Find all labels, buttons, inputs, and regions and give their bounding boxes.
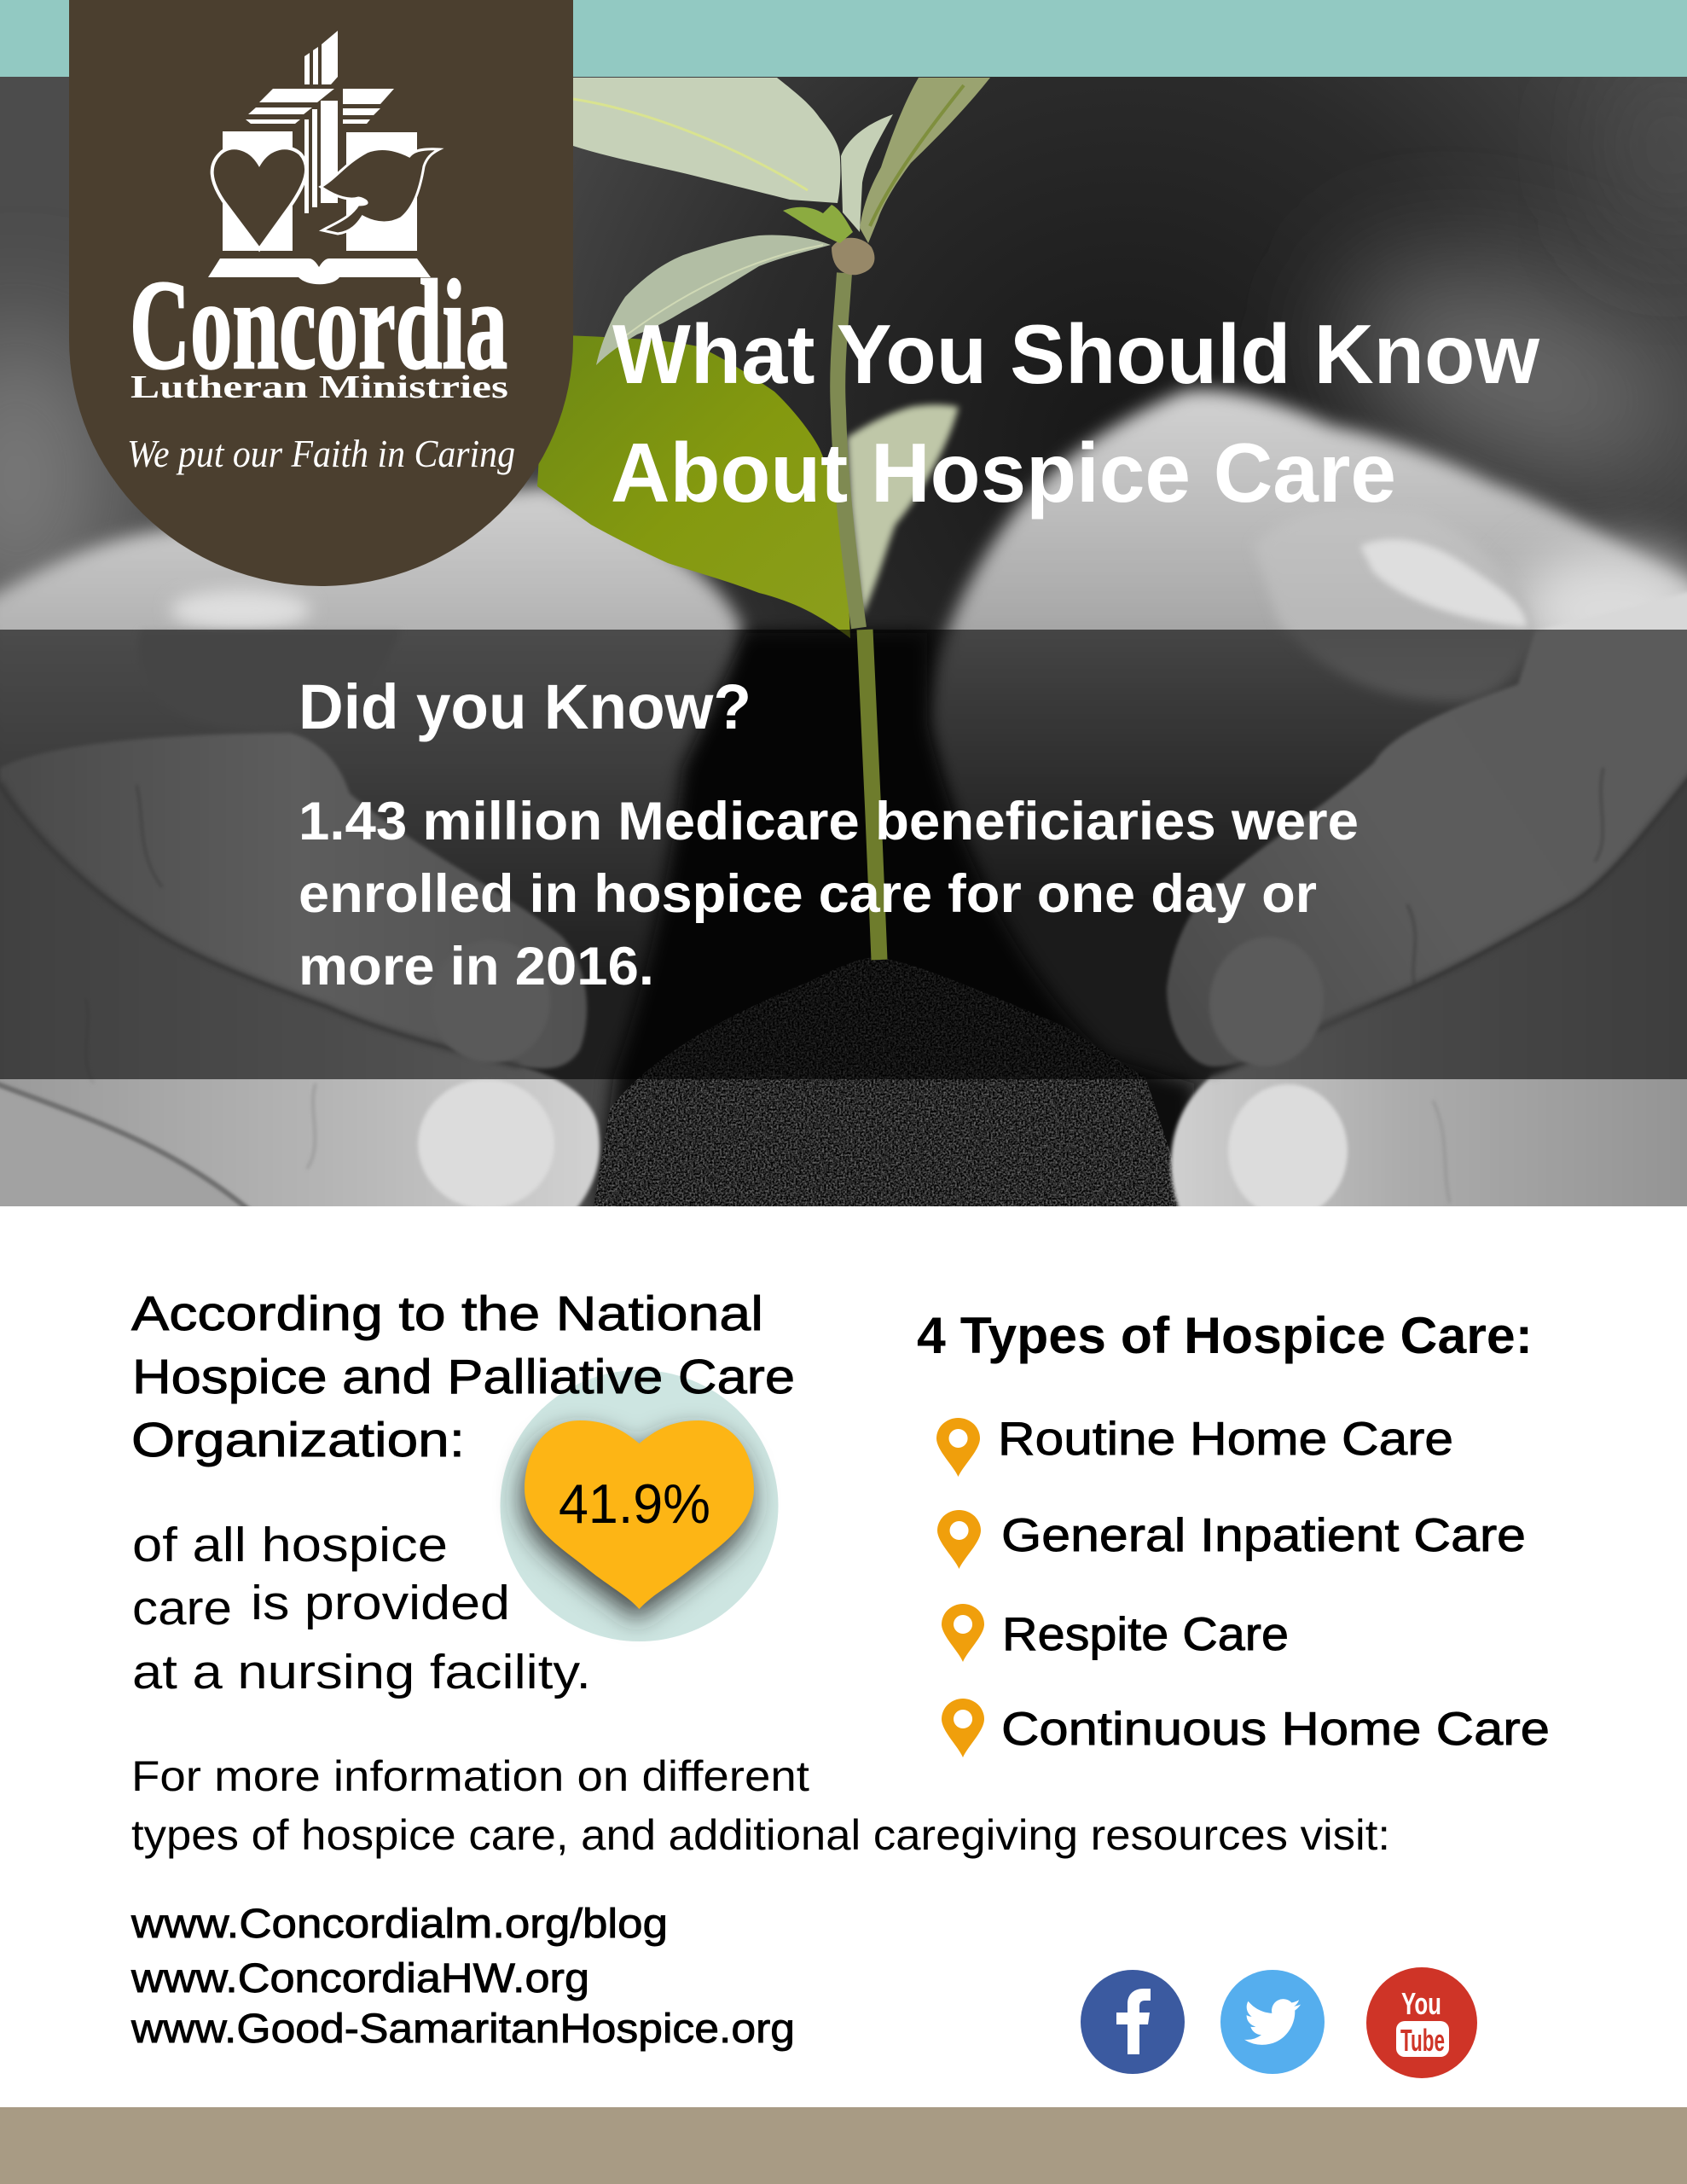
nursing facility text: of all hospice [132, 1518, 448, 1572]
pale circle [500, 1370, 778, 1641]
resource links: www.ConcordiaHW.org [130, 1956, 589, 2001]
right hand [926, 376, 1687, 894]
statistic circle and heart [500, 1370, 778, 1641]
resource links: www.Concordialm.org/blog [130, 1902, 668, 1947]
nursing facility text: is provided [251, 1576, 510, 1630]
heart shadow [522, 1432, 751, 1621]
footer bar [0, 2107, 1687, 2184]
icon: map pin [937, 1510, 981, 1569]
hero photo: hands cradling a seedling [0, 60, 1687, 1220]
stem [838, 273, 859, 628]
list item: routine home care [936, 1412, 1453, 1477]
main title: About Hospice Care [611, 426, 1396, 520]
did you know heading: Did you Know? [299, 671, 751, 742]
icon: map pin [942, 1699, 984, 1757]
upper right olive leaf [860, 78, 990, 243]
did you know statistic [299, 792, 1359, 996]
nursing facility text [132, 1518, 591, 1699]
seedling [537, 78, 990, 638]
upper left leaf [573, 78, 840, 203]
icon: youtube [1366, 1967, 1477, 2078]
logo subtitle: Lutheran Ministries [130, 369, 508, 405]
top teal bar [0, 0, 1687, 77]
icon: youtube: You [1401, 1986, 1441, 2021]
heart [525, 1420, 754, 1609]
logo tagline: We put our Faith in Caring [127, 432, 515, 475]
NHPCO heading: According to the National [131, 1287, 763, 1341]
percentage: 41.9% [559, 1472, 710, 1535]
more information text: types of hospice care, and additional caregiving resources visit: [131, 1811, 1390, 1859]
nursing facility text: care [132, 1581, 232, 1635]
photo background [0, 77, 1687, 1206]
list item: continuous home care: Continuous Home Care [1001, 1702, 1550, 1755]
logo emblem: cross, heart, dove and book [208, 31, 439, 284]
icon: map pin [936, 1418, 980, 1477]
more information text [131, 1752, 1390, 1859]
types heading: 4 Types of Hospice Care: [917, 1307, 1533, 1364]
logo shield [69, 0, 573, 586]
logo wordmark: Concordia [130, 254, 507, 396]
green leaf [537, 334, 850, 638]
icon: facebook [1081, 1970, 1185, 2074]
pale front leaf [847, 404, 959, 616]
main title [611, 307, 1540, 520]
stem inside band [865, 630, 879, 960]
resource links: www.Good-SamaritanHospice.org [130, 2007, 795, 2052]
main title: What You Should Know [612, 307, 1540, 401]
NHPCO heading: Organization: [131, 1413, 465, 1467]
did you know statistic: enrolled in hospice care for one day or [299, 864, 1317, 924]
left hand [0, 474, 752, 921]
NHPCO heading: Hospice and Palliative Care [132, 1350, 795, 1404]
NHPCO heading [131, 1287, 795, 1467]
icon: youtube: Tube [1400, 2023, 1445, 2058]
did you know statistic: more in 2016. [299, 937, 654, 996]
dark translucent band [0, 630, 1687, 1079]
right fingers [1167, 509, 1687, 1217]
list item: respite care: Respite Care [1002, 1607, 1289, 1660]
icon: map pin [942, 1604, 984, 1662]
resource links [130, 1902, 795, 2052]
dark gap between the hands [597, 633, 1194, 1211]
more information text: For more information on different [131, 1752, 809, 1800]
bud [783, 205, 853, 243]
soil mound [593, 957, 1190, 1211]
nursing facility text: at a nursing facility. [132, 1645, 591, 1699]
leaf node [832, 238, 874, 275]
list item: general inpatient care: General Inpatient Care [1001, 1508, 1526, 1561]
icon: twitter [1220, 1970, 1325, 2074]
small upright leaf [841, 114, 893, 232]
left fingers [0, 630, 600, 1216]
did you know statistic: 1.43 million Medicare beneficiaries were [299, 792, 1359, 851]
mid left leaf [596, 235, 831, 365]
list item: routine home care: Routine Home Care [998, 1412, 1453, 1465]
